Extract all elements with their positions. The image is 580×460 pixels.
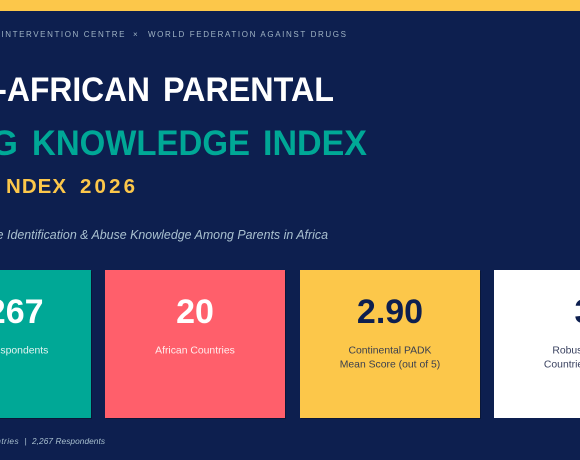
- stat card: respondents: [0, 270, 92, 419]
- stat card: countries: [105, 270, 286, 419]
- title line 1: [0, 71, 334, 109]
- stat card: mean score: Mean Score (out of 5): [340, 360, 440, 370]
- top accent bar: [0, 0, 580, 11]
- footer note: |: [24, 436, 27, 446]
- footer note: 2,267 Respondents: [31, 436, 105, 446]
- stat card: mean score: [300, 270, 481, 419]
- organisations line: INTERVENTION CENTRE: [2, 30, 125, 39]
- stat card: countries: African Countries: [155, 346, 235, 356]
- organisations line: [2, 30, 346, 39]
- index year heading: 2026: [80, 175, 135, 198]
- title line 2: [0, 124, 368, 163]
- stat card: mean score: Continental PADK: [349, 346, 432, 356]
- stat card: robust countries: [494, 270, 580, 418]
- index year heading: NDEX: [6, 175, 66, 198]
- organisations line: WORLD FEDERATION AGAINST DRUGS: [148, 30, 346, 39]
- footer note: [0, 436, 105, 446]
- stat card: countries: 20: [176, 293, 214, 331]
- stat card: mean score: 2.90: [357, 293, 423, 331]
- title line 2: KNOWLEDGE: [32, 124, 250, 163]
- organisations line: ×: [133, 30, 138, 39]
- title line 2: INDEX: [263, 124, 368, 163]
- index year heading: [0, 175, 135, 198]
- title line 1: PARENTAL: [163, 71, 334, 109]
- subtitle: Identification & Abuse Knowledge Among Parents in Africa: [7, 228, 328, 242]
- title line 1: AFRICAN: [7, 71, 150, 109]
